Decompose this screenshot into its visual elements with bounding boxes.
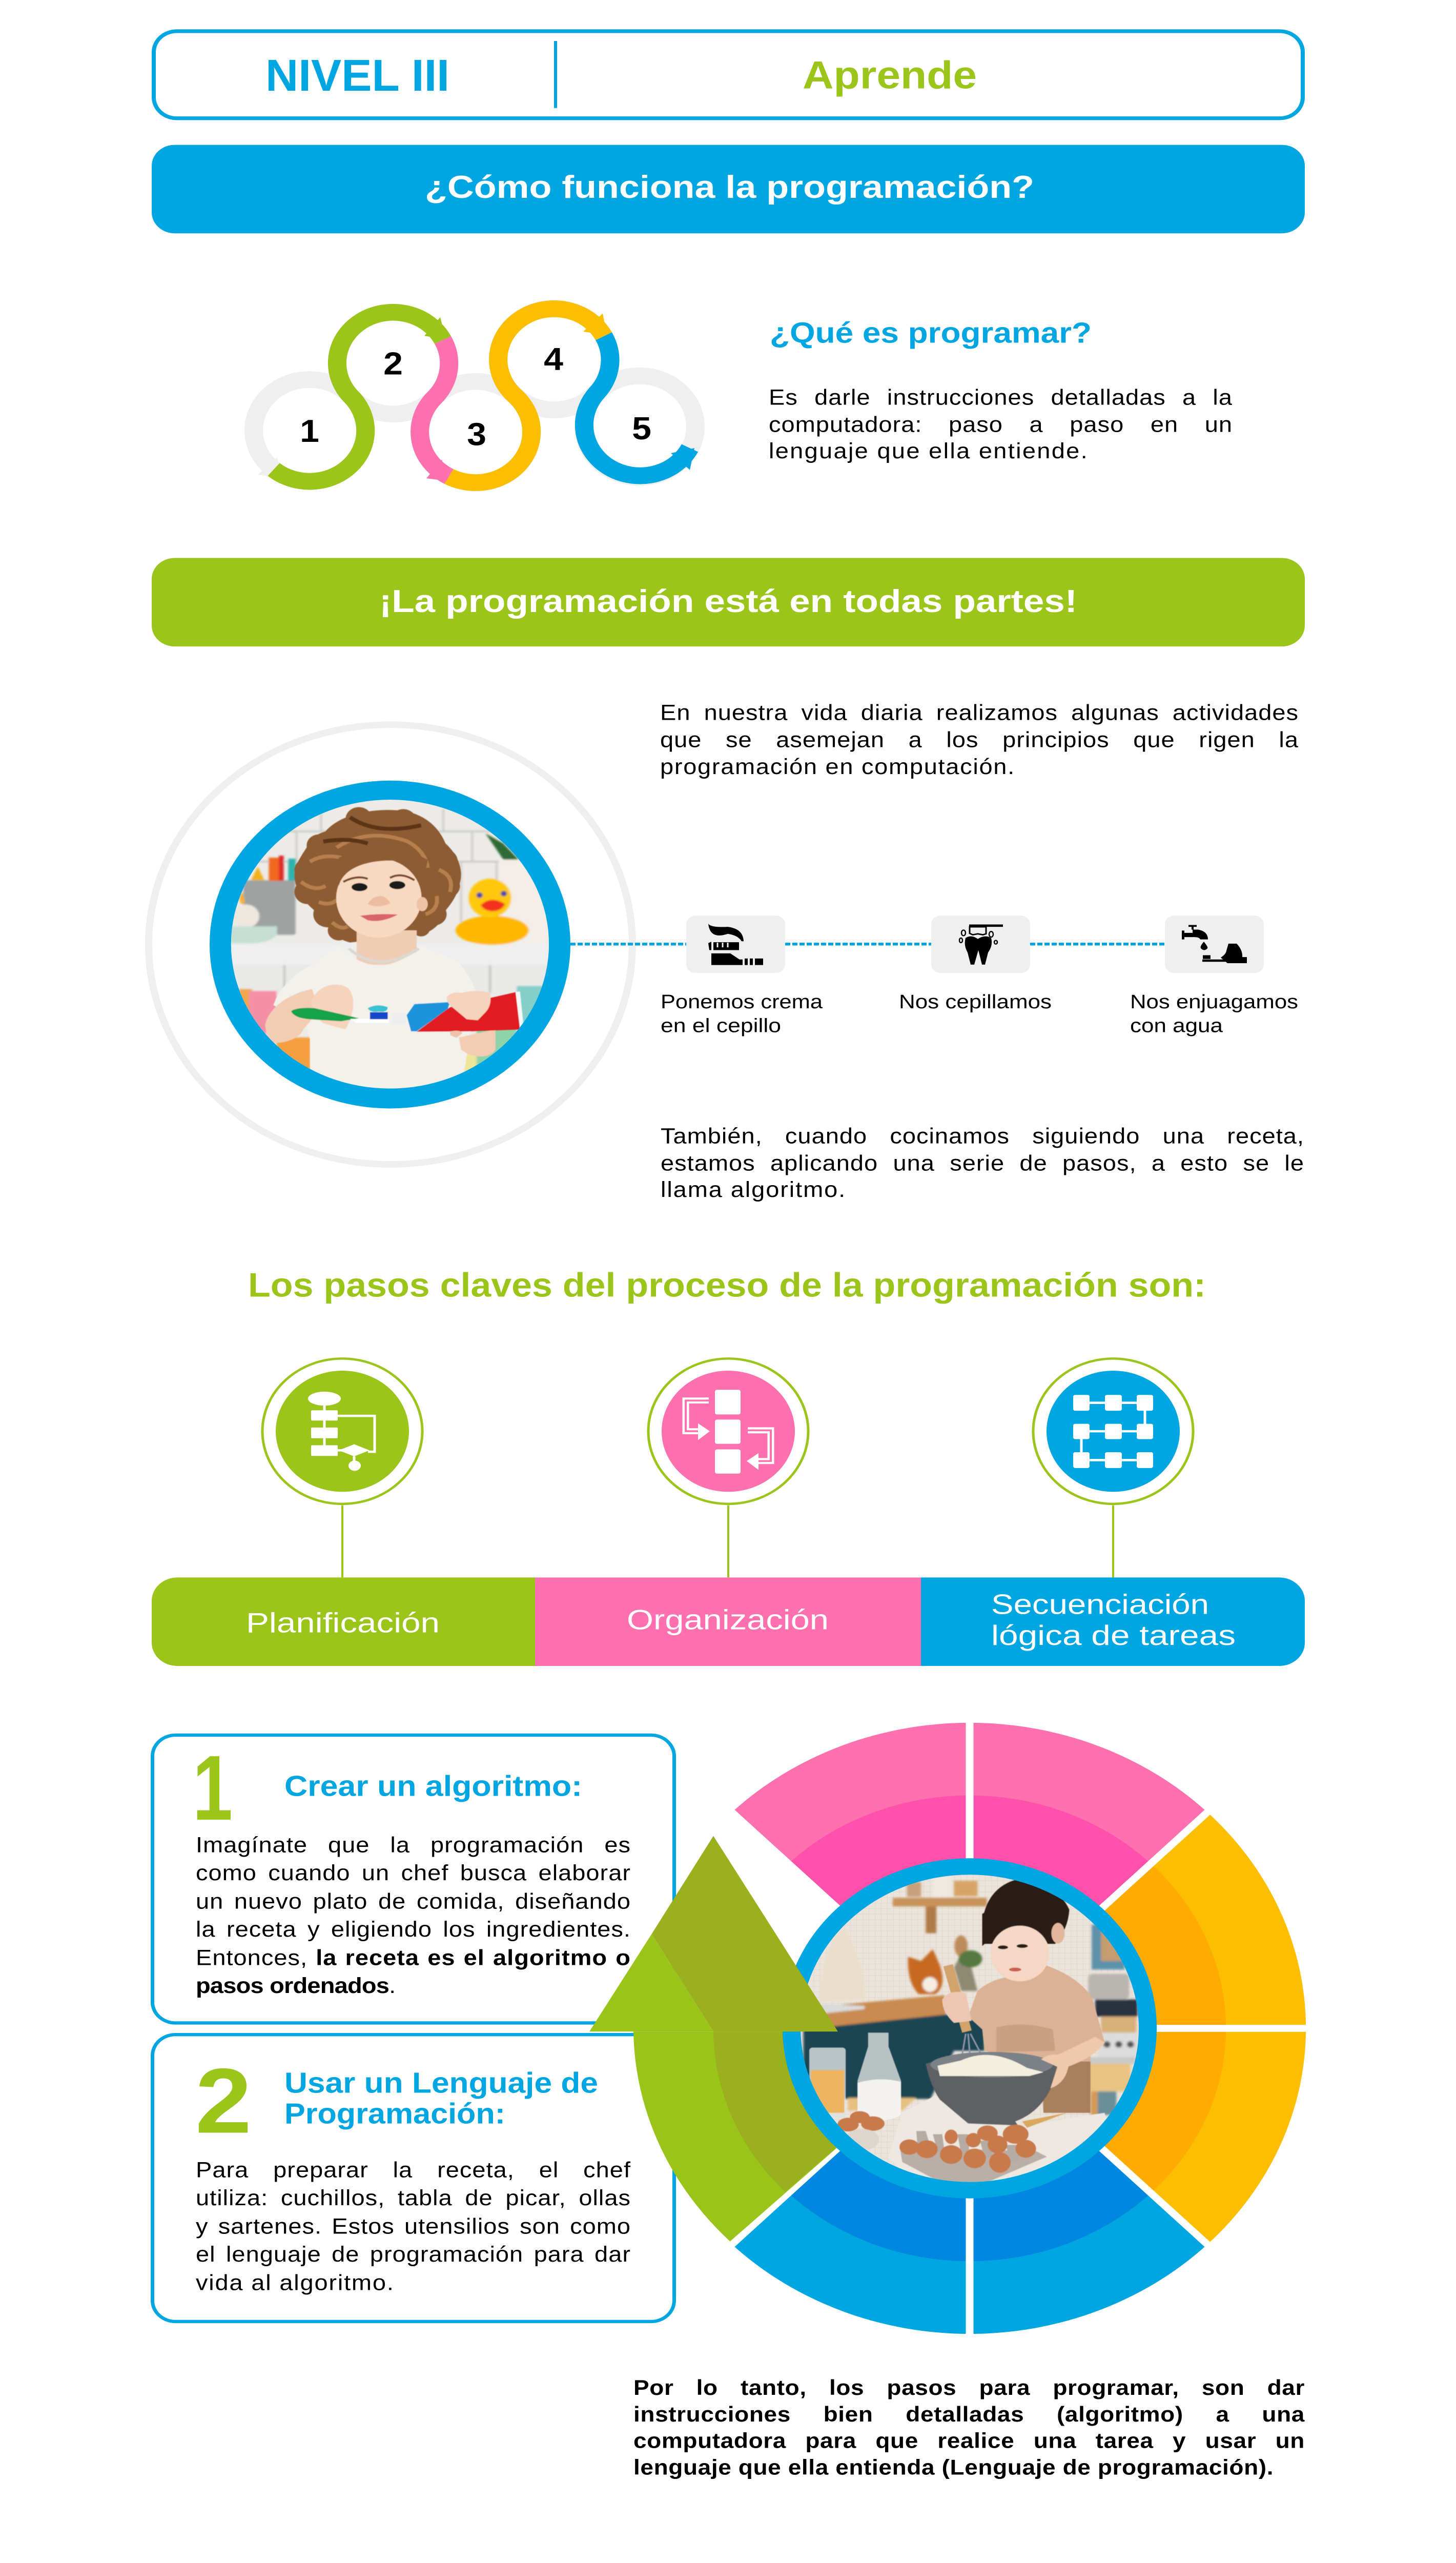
banner: como funciona <box>152 145 1305 233</box>
curly hair <box>294 807 461 943</box>
segment: secuenciacion: Secuenciación <box>991 1589 1209 1620</box>
table and paper <box>888 2096 1107 2186</box>
text: crear un algoritmo body: Entonces, la receta es el algoritmo o <box>196 1945 631 1969</box>
number 1: 1 <box>193 1737 233 1840</box>
text: crear un algoritmo body: como cuando un chef busca elaborar <box>196 1860 631 1885</box>
green arrow shaft <box>633 2031 970 2242</box>
header: nivel and aprende <box>154 31 1303 118</box>
photo: child baking in kitchen <box>783 1858 1166 2201</box>
icon card: brushing tooth <box>931 916 1030 973</box>
segment: organizacion: Organización <box>627 1604 829 1636</box>
text: usar un lenguaje body: y sartenes. Estos utensilios son como <box>196 2213 631 2238</box>
icon: organization blocks <box>648 1358 808 1504</box>
label: en el cepillo: en el cepillo <box>661 1014 781 1036</box>
nivel label: NIVEL III <box>265 51 449 100</box>
segment: planificacion <box>152 1577 535 1666</box>
segment: planificacion: Planificación <box>246 1608 440 1639</box>
connector lines from icons to bar <box>342 1506 1113 1577</box>
whisk and arm <box>948 1965 967 2031</box>
dress <box>968 1965 1104 2113</box>
text: usar un lenguaje body <box>196 2155 631 2300</box>
icon: five step loop arrows <box>254 308 695 483</box>
panel: usar un lenguaje <box>153 2035 674 2322</box>
text: conclusion: computadora para que realice una tarea y usar un <box>633 2428 1305 2452</box>
icon card: toothpaste on brush <box>686 916 785 973</box>
banner: como funciona: ¿Cómo funciona la programación? <box>425 169 1034 205</box>
right hand <box>447 991 490 1020</box>
text: tambien cocinamos <box>661 1123 1304 1206</box>
text: vida diaria: programación en computación. <box>660 754 1015 779</box>
text: crear un algoritmo body: un nuevo plato de comida, diseñando <box>196 1888 631 1913</box>
text: conclusion: lenguaje que ella entienda (Lenguaje de programación). <box>633 2455 1274 2479</box>
text: usar un lenguaje body: utiliza: cuchillos, tabla de picar, ollas <box>196 2185 631 2210</box>
text: tambien cocinamos: llama algoritmo. <box>661 1177 846 1202</box>
text: tambien cocinamos: También, cuando cocinamos siguiendo una receta, <box>661 1124 1304 1148</box>
segment: secuenciacion <box>921 1577 1305 1666</box>
text: conclusion: instrucciones bien detalladas (algoritmo) a una <box>633 2402 1305 2426</box>
text: vida diaria: que se asemejan a los principios que rigen la <box>660 727 1299 751</box>
arms <box>265 989 319 1043</box>
text: usar un lenguaje body: vida al algoritmo. <box>196 2270 395 2295</box>
text: que es programar: Es darle instrucciones detalladas a la <box>769 384 1233 410</box>
dotted connector line <box>570 943 1165 946</box>
heading: que es programar: ¿Qué es programar? <box>770 316 1092 349</box>
text: crear un algoritmo body: la receta y eligiendo los ingredientes. <box>196 1917 631 1941</box>
aprende label: Aprende <box>803 53 977 97</box>
step title 2: Programación: <box>284 2097 505 2130</box>
segment: secuenciacion: lógica de tareas <box>991 1620 1236 1652</box>
labels under the three icons <box>661 991 1298 1036</box>
text: conclusion <box>633 2374 1305 2484</box>
outer gray ring <box>149 725 632 1164</box>
green arrow head <box>589 1836 838 2031</box>
step title 2 <box>284 2066 598 2130</box>
heading: pasos claves: Los pasos claves del proceso de la programación son: <box>248 1267 1206 1304</box>
toothpaste tube <box>393 1013 406 1024</box>
duck toy <box>456 916 529 945</box>
text: que es programar: computadora: paso a paso en un <box>769 412 1233 436</box>
text: crear un algoritmo body: Imagínate que la programación es <box>196 1832 631 1857</box>
step title 1: Crear un algoritmo: <box>284 1769 582 1802</box>
jar of juice <box>809 2048 846 2118</box>
photo: child with toothbrush <box>210 781 570 1108</box>
shirt <box>273 946 477 1092</box>
icon: five step loop arrows: 5 <box>632 411 651 446</box>
icon: five step loop arrows: 3 <box>467 417 486 452</box>
icon: five step loop arrows: 4 <box>544 341 563 377</box>
segment: organizacion <box>535 1577 921 1666</box>
step title 2: Usar un Lenguaje de <box>284 2066 598 2099</box>
banner: la programacion esta en todas partes <box>152 558 1305 646</box>
three part step bar <box>152 1577 1305 1666</box>
face <box>336 859 422 938</box>
panel: crear un algoritmo <box>153 1735 674 2023</box>
eggs and carton <box>900 2147 1047 2183</box>
label: nos cepillamos: Nos cepillamos <box>899 991 1052 1013</box>
icon: sequence grid <box>1033 1358 1193 1504</box>
text: conclusion: Por lo tanto, los pasos para programar, son dar <box>633 2375 1305 2399</box>
text: que es programar: lenguaje que ella entiende. <box>769 438 1089 463</box>
text: vida diaria: En nuestra vida diaria realizamos algunas actividades <box>660 700 1299 725</box>
number 2: 2 <box>195 2050 252 2152</box>
text: crear un algoritmo body: pasos ordenados. <box>196 1973 395 1998</box>
icon: five step loop arrows: 1 <box>300 413 319 449</box>
banner: la programacion esta en todas partes: ¡La programación está en todas partes! <box>379 583 1077 619</box>
text: que es programar <box>769 384 1233 467</box>
icon: five step loop arrows: 2 <box>383 345 403 381</box>
icon: planning flowchart <box>262 1358 422 1504</box>
head and hair <box>982 1879 1069 1944</box>
text: usar un lenguaje body: Para preparar la receta, el chef <box>196 2157 631 2182</box>
text: vida diaria <box>660 699 1299 783</box>
wheel chart segments <box>726 1714 1312 2343</box>
mixing bowl <box>926 2056 1057 2130</box>
label: ponemos crema: Ponemos crema <box>661 991 823 1013</box>
text: usar un lenguaje body: el lenguaje de programación para dar <box>196 2242 631 2266</box>
milk bottle <box>857 2032 901 2121</box>
icon card: rinsing with tap water <box>1165 916 1264 973</box>
label: nos enjuagamos: Nos enjuagamos <box>1130 991 1298 1013</box>
label: con agua: con agua <box>1130 1014 1223 1036</box>
toothbrush <box>291 1008 359 1021</box>
text: crear un algoritmo body <box>196 1830 631 2003</box>
text: tambien cocinamos: estamos aplicando una serie de pasos, a esto se le <box>661 1150 1304 1175</box>
